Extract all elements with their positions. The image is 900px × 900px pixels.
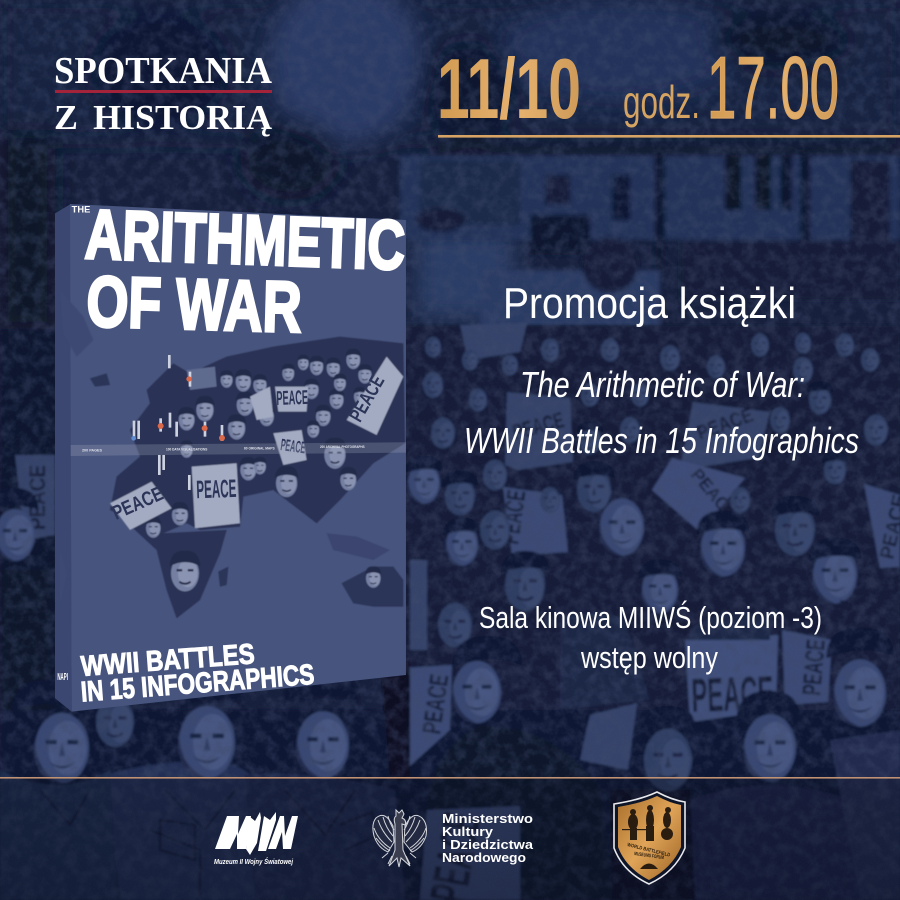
world map photo	[60, 290, 405, 618]
crowd base	[400, 325, 900, 790]
cover info band: 200 PAGES	[82, 449, 103, 453]
uniform details	[40, 790, 378, 895]
peace lettering on the map: PEACE	[345, 372, 389, 426]
divider above footer	[0, 777, 900, 779]
icon: World Battlefield Museums Forum shield	[614, 792, 685, 884]
series logo: Spotkania z historią	[54, 50, 273, 137]
book title text: The Arithmetic of War:	[520, 364, 805, 405]
back rows of faces	[423, 333, 888, 513]
book cover	[55, 195, 406, 712]
PEACE lettering on papers: PEACE	[510, 407, 567, 445]
cover info band: 100 DATA VISUALISATIONS	[166, 448, 208, 452]
date and time: godz.	[623, 76, 700, 128]
book spine	[55, 204, 72, 712]
australia	[342, 567, 403, 607]
venue details: wstęp wolny	[580, 640, 718, 675]
book title text	[464, 364, 859, 461]
venue details	[479, 599, 822, 675]
front row uniforms	[0, 340, 900, 900]
faces	[145, 349, 381, 591]
series logo: Spotkania z historią: SPOTKANIA	[54, 50, 273, 92]
PEACE lettering on papers: PEACE	[796, 638, 831, 697]
cover title: OF WAR	[86, 262, 303, 348]
peace lettering on the map: PEACE	[279, 435, 307, 457]
ministry logo text: Kultury	[442, 824, 494, 839]
logo: Muzeum II Wojny Światowej	[214, 812, 298, 866]
middle rows of faces	[405, 456, 861, 647]
cover info band	[71, 442, 406, 456]
newspapers	[15, 323, 900, 900]
event heading: Promocja książki	[503, 279, 796, 328]
cover info band: 60 ORIGINAL MAPS	[244, 446, 275, 450]
peace lettering on the map: PEACE	[196, 475, 237, 504]
cover subtitle: IN 15 INFOGRAPHICS	[80, 659, 315, 709]
peace lettering on the map: PEACE	[109, 483, 167, 525]
PEACE lettering on papers: PEACE	[691, 667, 774, 723]
peace lettering on the map	[109, 372, 389, 525]
book front	[70, 204, 406, 712]
date and time	[437, 38, 900, 138]
icon: Polish eagle emblem	[373, 810, 426, 867]
peace signs	[110, 357, 403, 530]
cover subtitle	[80, 638, 315, 709]
south-east asia islands	[327, 533, 390, 560]
ministry logo text: Ministerstwo	[442, 811, 533, 826]
ministry logo text: Narodowego	[442, 850, 526, 865]
date and time: 11/10	[437, 42, 581, 137]
buildings	[400, 150, 900, 330]
cover title: ARITHMETIC	[84, 195, 406, 284]
PEACE lettering on papers: PEACE	[25, 465, 50, 530]
battle markers	[131, 355, 225, 490]
logo: Muzeum II Wojny Światowej: Muzeum II Wojny Światowej	[214, 857, 294, 866]
eurasia	[110, 337, 405, 533]
series logo: Spotkania z historią: Z HISTORIĄ	[54, 98, 273, 137]
street and trees	[0, 0, 900, 330]
PEACE lettering on papers: PEACE	[694, 404, 756, 445]
icon: World Battlefield Museums Forum shield: MUSEUMS FORUM	[634, 851, 664, 861]
africa	[113, 510, 227, 618]
PEACE lettering on papers: PEACE	[416, 672, 454, 736]
PEACE lettering on papers: PEACE	[494, 488, 531, 546]
ministry logo text	[442, 811, 534, 865]
cover subtitle: WWII BATTLES	[80, 638, 256, 683]
PEACE lettering on papers	[25, 404, 900, 900]
front row faces	[0, 488, 894, 791]
cover info band: 200 ARCHIVAL PHOTOGRAPHS	[320, 445, 365, 449]
PEACE lettering on papers: PEACE	[687, 465, 741, 524]
cover title	[84, 195, 406, 348]
book cover: NAPI	[57, 672, 68, 683]
icon: World Battlefield Museums Forum shield: WORLD BATTLEFIELD	[627, 842, 671, 859]
cover title small: THE	[72, 205, 90, 215]
peace lettering on the map: PEACE	[276, 387, 308, 410]
ministry logo text: i Dziedzictwa	[442, 837, 534, 852]
